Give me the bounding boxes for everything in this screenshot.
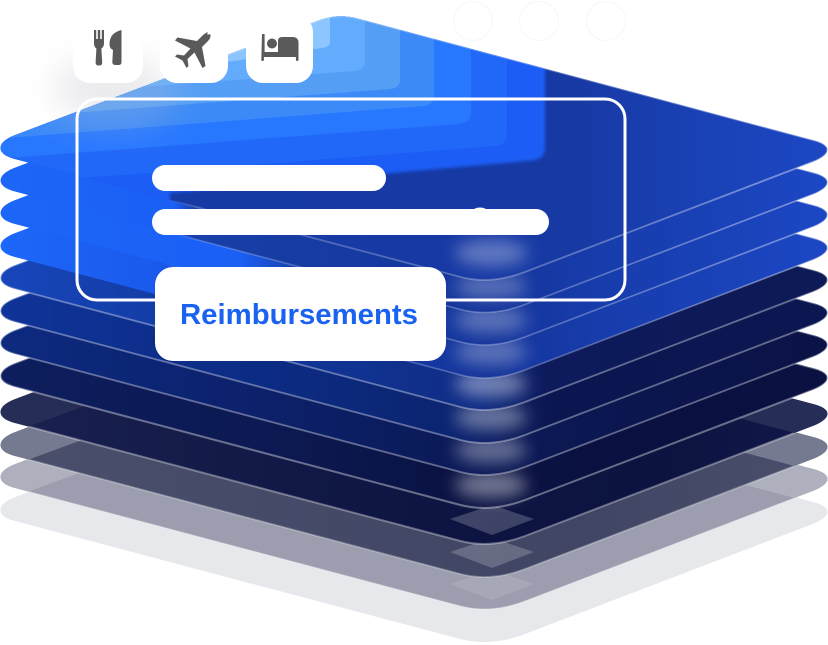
plate 7: [0, 211, 828, 475]
label text: Reimbursements: [180, 299, 418, 331]
plate 1 (top) with bright contour bands: [0, 0, 828, 280]
plate 11: [0, 460, 828, 609]
icon card: bed: [246, 15, 313, 83]
icon card: airplane: [160, 15, 228, 83]
plate 6: [0, 179, 828, 443]
plate 5: [0, 146, 828, 410]
plate 3: [0, 81, 828, 345]
plate 4: [0, 114, 828, 378]
icon shadow glow: [54, 56, 170, 120]
plate 2: [0, 49, 828, 313]
outline frame: [77, 99, 625, 300]
placeholder bar 2: [152, 208, 549, 235]
placeholder bar 1: [152, 165, 386, 191]
label card: [155, 267, 446, 361]
faint circles: [454, 2, 626, 40]
plate 10: [0, 426, 828, 578]
plate 12 (bottom): [0, 378, 828, 642]
plate 8: [0, 244, 828, 508]
plate 9: [0, 392, 828, 545]
icon card: fork and knife: [73, 15, 143, 83]
